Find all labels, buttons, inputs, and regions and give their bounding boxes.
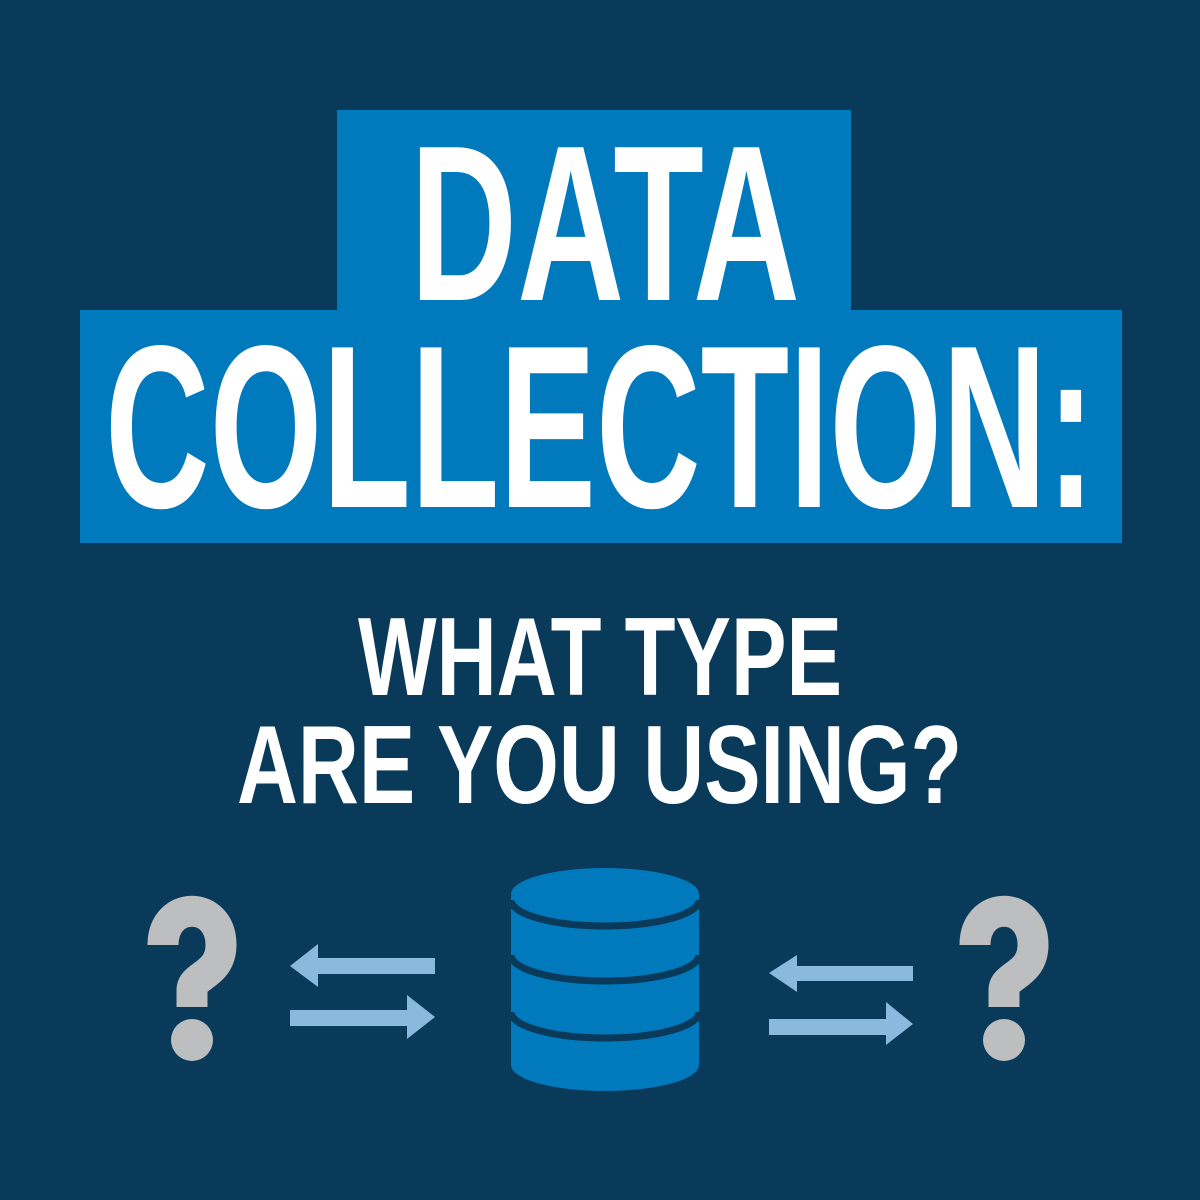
icon: right question mark bbox=[975, 911, 1033, 1061]
title box: bottom bbox=[80, 310, 1122, 543]
title box: top bbox=[337, 110, 851, 311]
subtitle: ARE YOU USING? bbox=[237, 703, 962, 827]
icon: right arrows bbox=[769, 955, 913, 1045]
icon: left question mark bbox=[163, 911, 221, 1061]
subtitle: WHAT TYPE bbox=[358, 595, 842, 719]
icon: left arrows bbox=[290, 944, 435, 1039]
title text: DATA: DATA bbox=[410, 100, 800, 348]
subtitle bbox=[237, 595, 962, 827]
icon: database bbox=[505, 868, 705, 1091]
title block bbox=[80, 100, 1122, 557]
